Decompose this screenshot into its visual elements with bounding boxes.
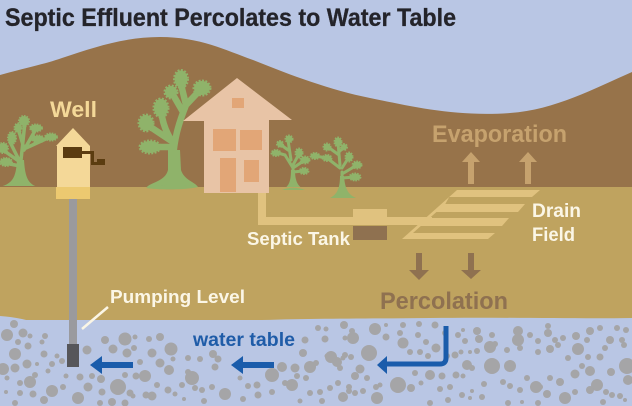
tree bases resting on the ground <box>3 176 356 198</box>
septic pipe <box>258 190 432 225</box>
well roof <box>56 128 90 146</box>
label: drain field <box>532 201 581 246</box>
arrow: percolation into water table <box>377 326 446 374</box>
arrow: flow mid <box>231 356 274 374</box>
label: drain field: Drain <box>532 201 581 222</box>
well pipe <box>69 199 77 345</box>
pumping level pointer <box>82 307 108 329</box>
arrow: flow to well <box>90 356 133 374</box>
label: septic tank: Septic Tank <box>247 229 351 249</box>
tree: small right of house 2 <box>310 138 362 192</box>
well pump block <box>67 344 79 367</box>
drain field <box>402 190 540 239</box>
septic tank <box>353 209 387 240</box>
water table aquifer <box>0 316 632 406</box>
well body <box>57 146 90 188</box>
well window and crank <box>63 147 105 165</box>
arrows: percolation <box>409 253 481 280</box>
tree: small right of house 1 <box>272 136 310 190</box>
label: well: Well <box>50 97 97 122</box>
well <box>56 128 105 367</box>
house windows and door <box>213 98 262 192</box>
arrows: evaporation <box>462 152 537 184</box>
label: percolation: Percolation <box>380 288 508 315</box>
tree: far left <box>0 116 57 186</box>
house <box>183 78 292 193</box>
label: evaporation: Evaporation <box>432 121 567 148</box>
well base <box>56 187 90 199</box>
brown hills <box>0 37 632 190</box>
gravel pebbles <box>0 320 632 406</box>
title: Septic Effluent Percolates to Water Table <box>5 4 456 32</box>
label: water table: water table <box>192 330 295 351</box>
ground <box>0 187 632 320</box>
tree: large beside house <box>139 70 210 189</box>
label: drain field: Field <box>532 225 575 246</box>
label: pumping level: Pumping Level <box>110 287 245 307</box>
